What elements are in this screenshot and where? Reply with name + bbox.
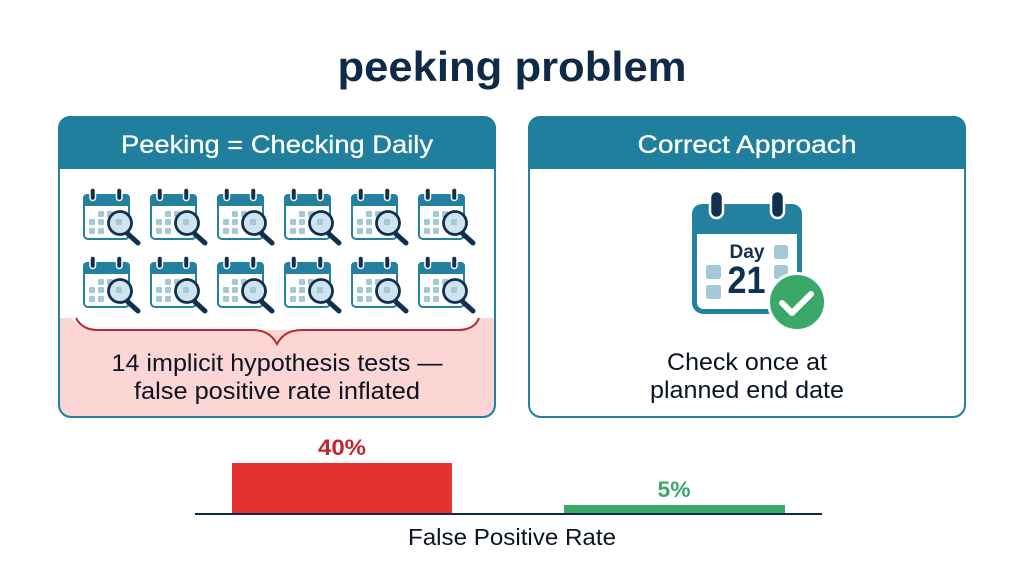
bar chart: false positive rate	[195, 435, 822, 550]
title: peeking problem	[338, 43, 686, 90]
pink inflated zone	[59, 318, 495, 417]
panel header	[528, 116, 966, 169]
axis line	[195, 513, 822, 515]
panel: peeking = checking daily	[58, 116, 496, 417]
panel heading: Correct Approach	[638, 131, 856, 159]
icon: day 21 calendar with check: 21	[728, 260, 766, 302]
panel: correct approach	[528, 116, 966, 417]
panel header	[58, 116, 496, 169]
bar: 5%	[564, 505, 785, 514]
icon: day 21 calendar with check	[692, 191, 826, 330]
panel border	[529, 117, 965, 417]
panel text: Check once at	[667, 349, 827, 376]
brace	[76, 318, 479, 344]
panel: correct approach: planned end date	[650, 377, 844, 404]
icon grid: calendars with magnifiers	[83, 188, 473, 311]
icon: day 21 calendar with check: Day	[730, 242, 765, 263]
panel border	[59, 117, 495, 417]
panel: peeking = checking daily: false positive rate inflated	[134, 378, 420, 405]
axis label: False Positive Rate	[408, 524, 616, 550]
bar: 40%	[232, 463, 452, 514]
panel heading: Peeking = Checking Daily	[121, 131, 434, 159]
value: 40%: 40%	[318, 435, 366, 460]
panel background	[59, 117, 495, 417]
value: 5%: 5%	[658, 477, 690, 502]
callout text: 14 implicit hypothesis tests —	[112, 350, 442, 377]
